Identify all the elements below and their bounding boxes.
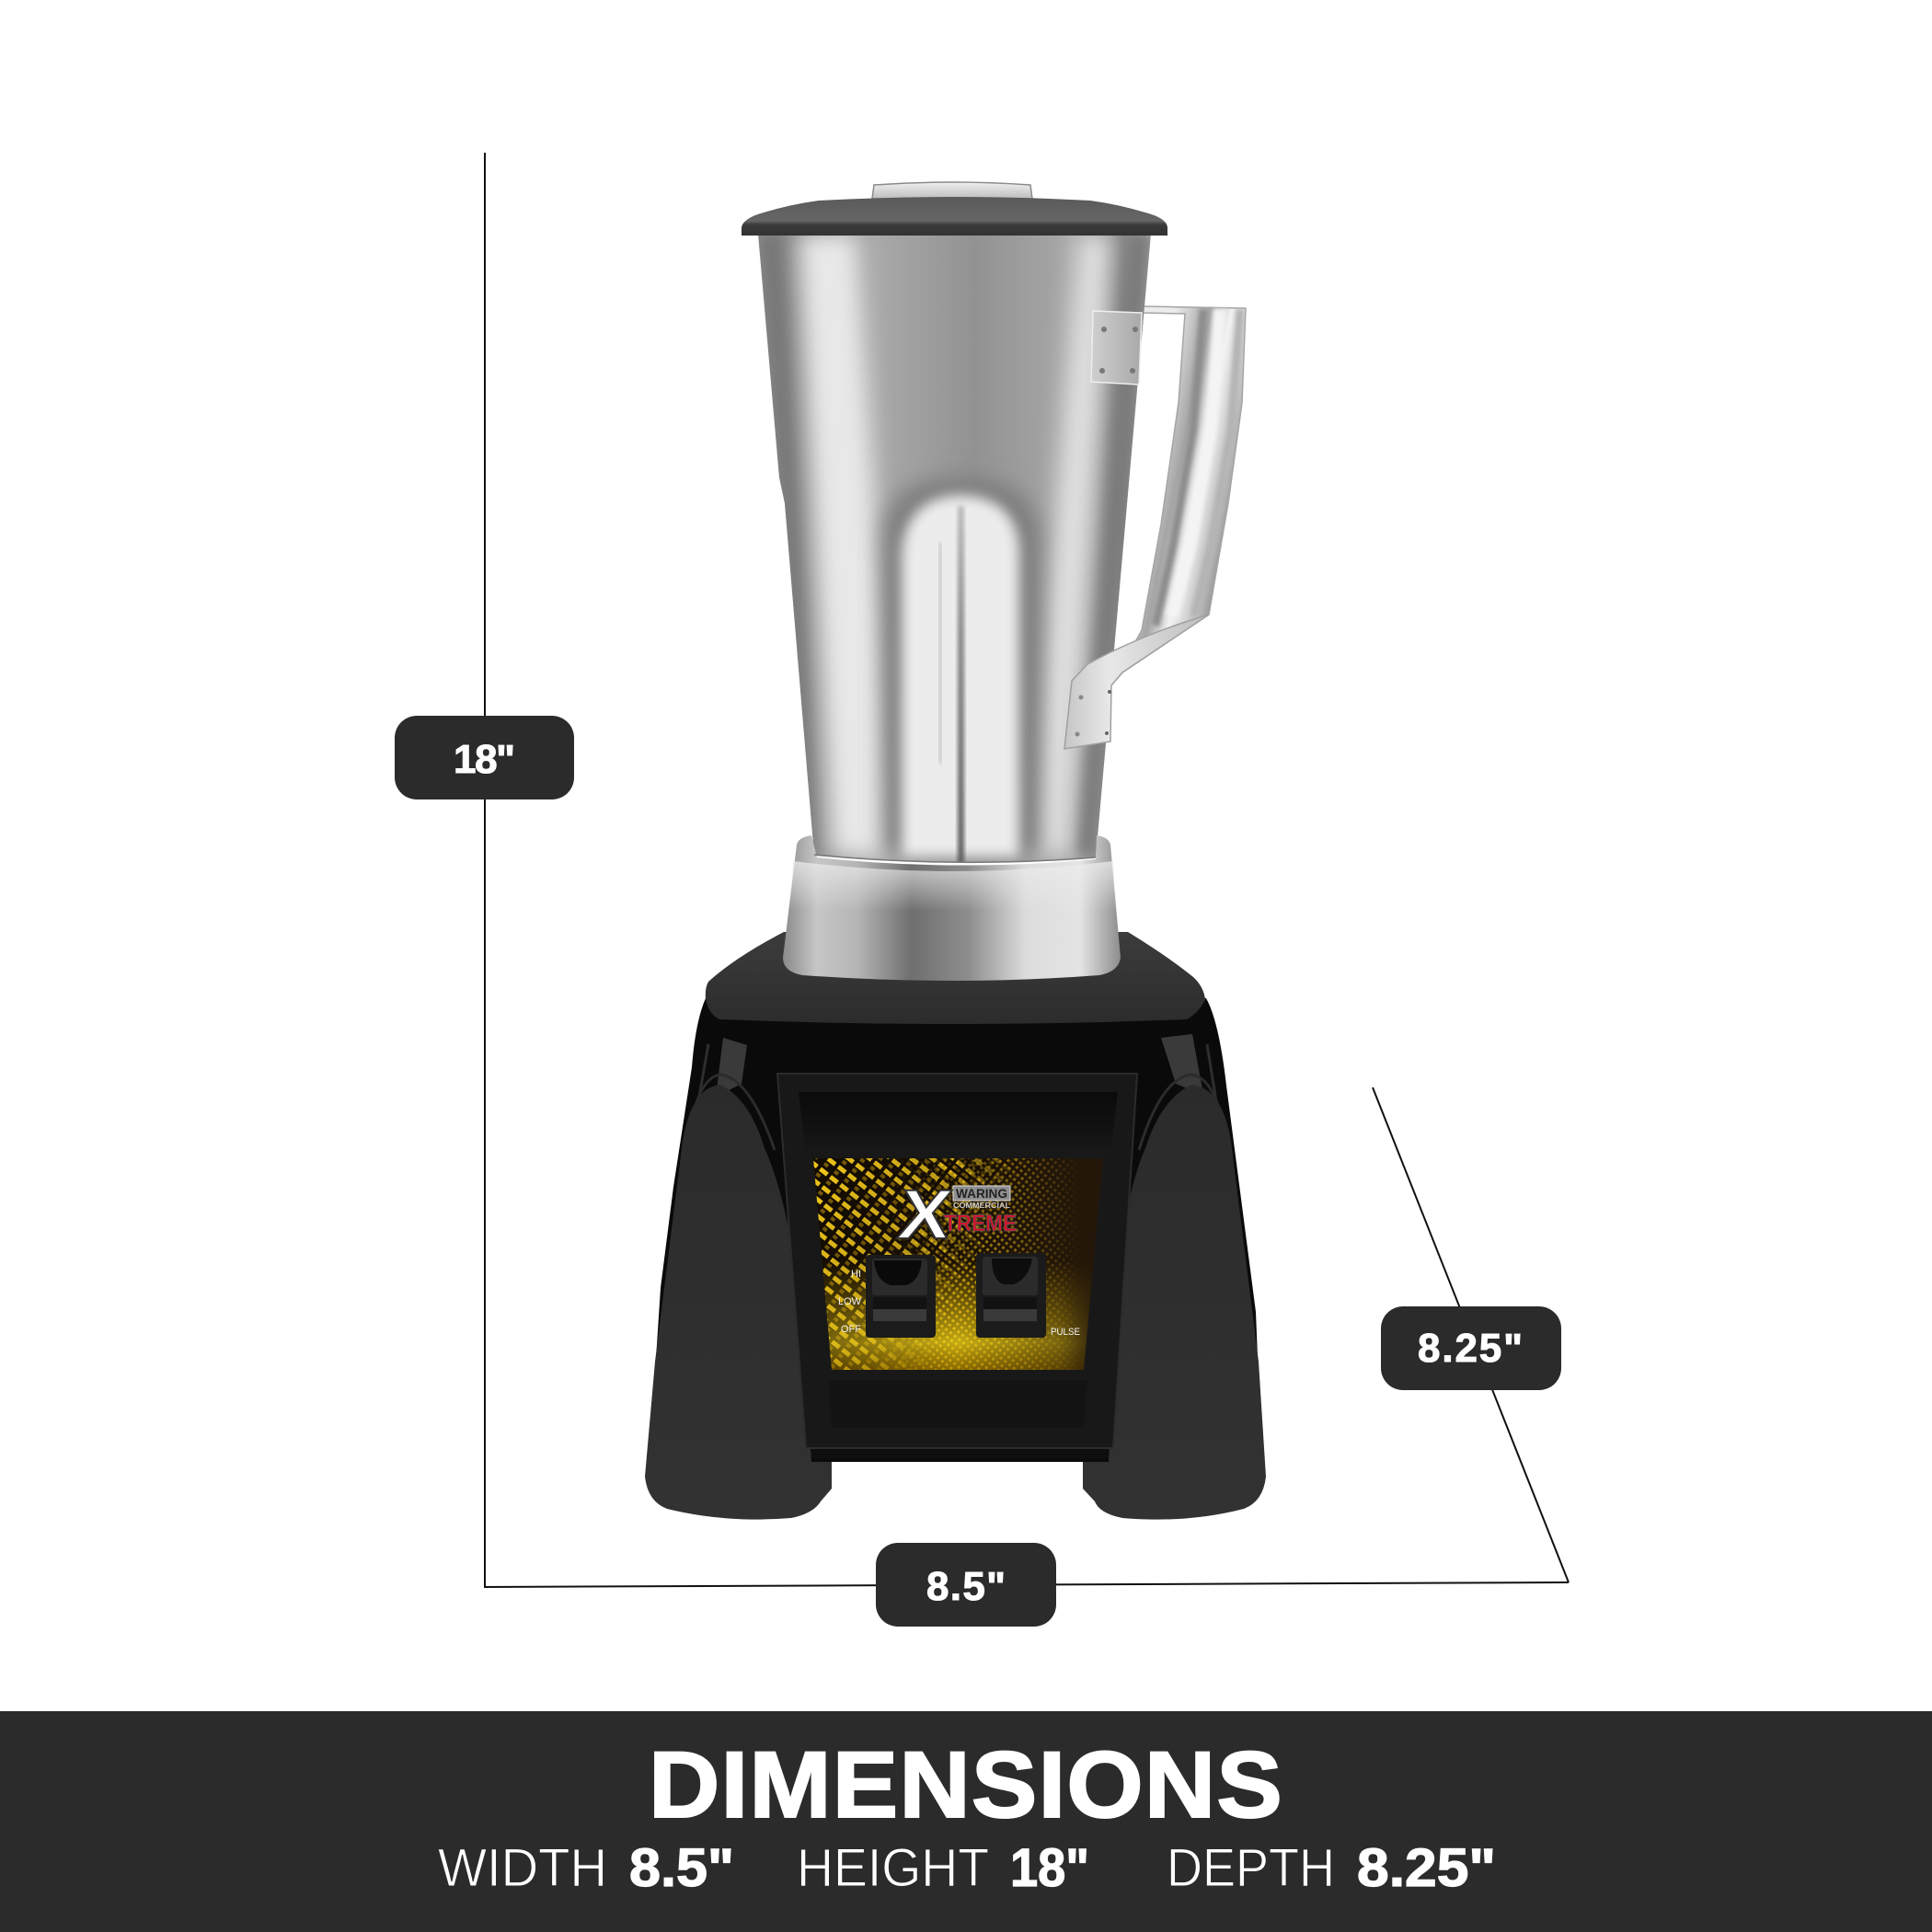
big X: X (894, 1176, 957, 1254)
pill: width 8.5 inches (876, 1543, 1056, 1627)
pill: height 18 inches: 18" (454, 737, 515, 782)
bullet centre stripe (958, 506, 964, 865)
control panel frame (777, 1074, 1137, 1459)
left edge shade (758, 234, 819, 856)
handle upper mount plate (1091, 311, 1142, 385)
depth spec: DEPTH (1167, 1838, 1335, 1898)
centre bullet highlight (902, 495, 1019, 857)
TREME text: TREME (944, 1211, 1017, 1236)
depth dimension line (1373, 1087, 1569, 1582)
speed labels: OFF (841, 1324, 861, 1335)
height spec: 18" (1010, 1838, 1089, 1898)
width spec: WIDTH (438, 1838, 607, 1898)
panel upper recess (799, 1092, 1118, 1148)
height spec: HEIGHT (797, 1838, 989, 1898)
gloss highlights (683, 1034, 1233, 1187)
depth spec (1167, 1838, 1496, 1898)
speed labels (838, 1269, 1080, 1338)
WARING text: WARING (956, 1186, 1007, 1201)
lid shell (742, 197, 1167, 236)
heading: DIMENSIONS (649, 1732, 1282, 1837)
right foot (1083, 1085, 1266, 1520)
lower arm rivets (1075, 690, 1111, 736)
width spec: 8.5" (629, 1838, 734, 1898)
pill: width 8.5 inches: 8.5" (926, 1564, 1006, 1609)
left switch (866, 1255, 936, 1338)
depth spec: 8.25" (1357, 1838, 1496, 1898)
COMMERCIAL text: COMMERCIAL (953, 1202, 1010, 1210)
steel handle (1111, 305, 1247, 686)
width spec (438, 1838, 734, 1898)
handle lower arm (1064, 615, 1209, 749)
blender product (645, 182, 1266, 1520)
clear cap (872, 182, 1032, 199)
panel lower recess (828, 1380, 1087, 1428)
speed labels: PULSE (1051, 1327, 1080, 1338)
blender base body (649, 998, 1262, 1472)
height dimension line (484, 153, 486, 1587)
logo (894, 1176, 1017, 1254)
right bright band (1029, 234, 1111, 856)
bottom band (0, 1711, 1932, 1932)
lid (742, 182, 1167, 236)
speed labels: HI (851, 1269, 861, 1280)
height spec (797, 1838, 1089, 1898)
width dimension line (484, 1582, 1569, 1587)
centre bullet halo (883, 478, 1040, 856)
speed labels: LOW (838, 1296, 862, 1307)
yellow control label (813, 1158, 1103, 1370)
left bright band (799, 234, 897, 856)
panel bezel (777, 1074, 1137, 1448)
collar (783, 835, 1121, 981)
top plate (706, 932, 1205, 1024)
right switch (976, 1253, 1046, 1338)
pill: depth 8.25 inches: 8.25" (1418, 1326, 1523, 1371)
bullet side stripe (939, 543, 941, 764)
steel jar (758, 234, 1151, 865)
far right shade (1078, 234, 1151, 856)
pill: depth 8.25 inches (1381, 1306, 1561, 1390)
pill: height 18 inches (395, 716, 574, 799)
left foot (645, 1085, 832, 1520)
WARING badge (953, 1186, 1010, 1201)
